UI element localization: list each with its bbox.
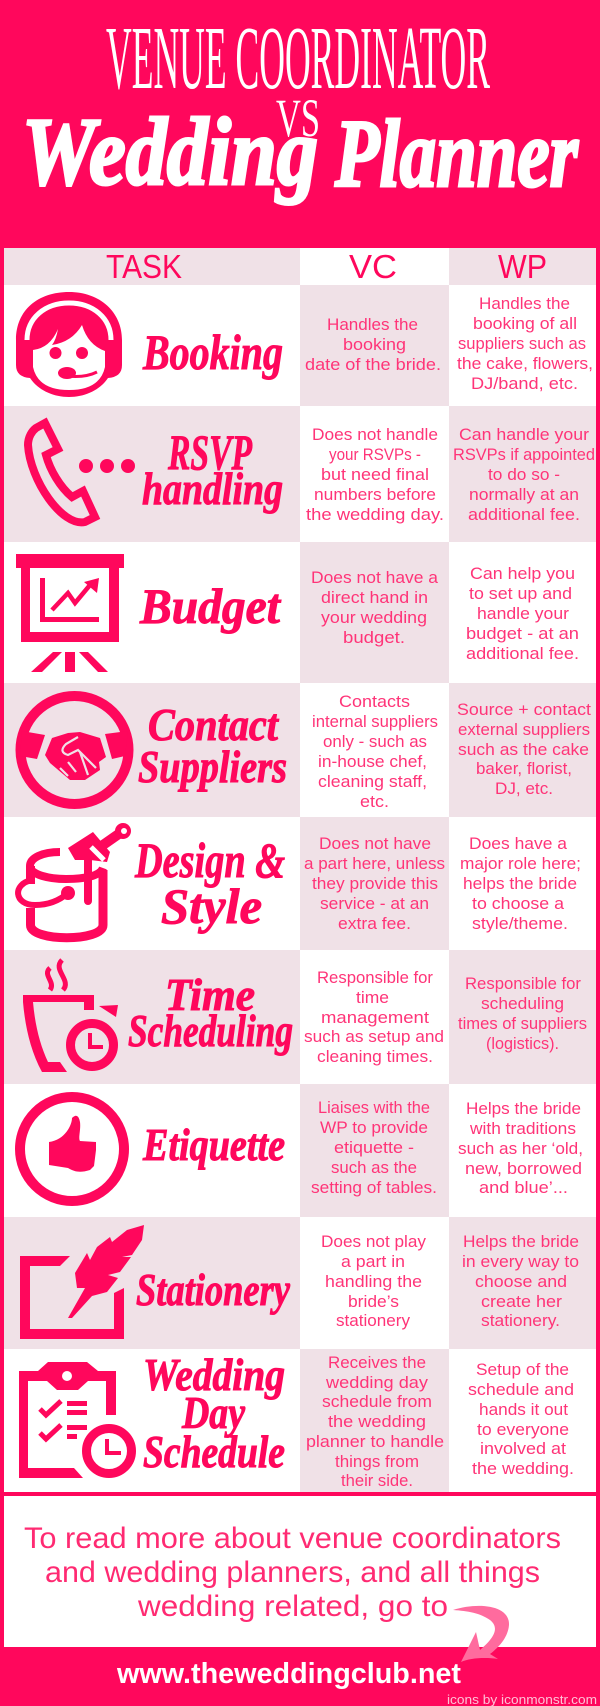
VC text: direct hand in: [321, 588, 428, 607]
WP text: Does have a: [469, 834, 568, 853]
label: Contact Suppliers: Suppliers: [138, 742, 287, 792]
VC text: [304, 968, 444, 1066]
label: Wedding Day Schedule: Schedule: [143, 1427, 285, 1477]
VC text: Does not play: [321, 1232, 427, 1251]
VC text: [311, 1098, 437, 1197]
WP text: [468, 1360, 574, 1478]
VC text: time: [356, 988, 389, 1007]
VC text: wedding day: [325, 1373, 429, 1392]
VC text: the wedding: [328, 1412, 426, 1431]
VC text: [311, 568, 439, 647]
WP text: external suppliers: [458, 720, 590, 739]
WP text: style/theme.: [472, 914, 568, 933]
WP text: suppliers such as: [458, 334, 586, 353]
WP text: involved at: [480, 1439, 566, 1458]
WP text: to set up and: [469, 584, 572, 603]
header row: TASK: [106, 248, 182, 285]
icon: headset operator: [16, 292, 122, 397]
VC text: the wedding day.: [306, 505, 444, 524]
arrow to url: [453, 1606, 509, 1662]
row: Booking: [4, 285, 596, 406]
WP text: create her: [481, 1292, 562, 1311]
footer call to action panel: To read more about venue coordinators: [24, 1522, 561, 1555]
label: Contact Suppliers: Contact: [148, 700, 279, 750]
WP text: with traditions: [469, 1119, 576, 1138]
row: RSVP handling: [4, 406, 596, 542]
WP text: new, borrowed: [465, 1159, 582, 1178]
WP text: the cake, flowers,: [457, 354, 593, 373]
label: Time Scheduling: Scheduling: [128, 1006, 293, 1056]
WP text: to everyone: [477, 1420, 569, 1439]
row: Contact Suppliers: [4, 683, 596, 817]
WP text: and blue’...: [479, 1178, 568, 1197]
label: Design & Style: Design &: [134, 832, 285, 888]
VC text: a part in: [341, 1252, 405, 1271]
WP text: Source + contact: [457, 700, 591, 719]
WP text: choose and: [475, 1272, 567, 1291]
VC text: a part here, unless: [304, 854, 445, 873]
row: Etiquette: [4, 1084, 596, 1217]
title: VS: [276, 88, 320, 148]
WP text: (logistics).: [486, 1034, 559, 1053]
WP text: additional fee.: [468, 505, 580, 524]
WP text: [457, 294, 593, 393]
VC text: schedule from: [322, 1392, 432, 1411]
comparison table: [4, 248, 596, 1492]
WP text: Handles the: [479, 294, 570, 313]
WP text: the wedding.: [472, 1459, 574, 1478]
VC text: Does not handle: [312, 425, 438, 444]
VC text: etiquette -: [334, 1138, 414, 1157]
VC text: management: [321, 1008, 429, 1027]
VC text: but need final: [321, 465, 429, 484]
label: Contact Suppliers: [138, 700, 287, 792]
WP text: times of suppliers: [458, 1014, 587, 1033]
label: Stationery: Stationery: [136, 1265, 291, 1315]
icon: clipboard checklist with clock: [19, 1362, 132, 1478]
icon: paint bucket and brush: [18, 823, 131, 938]
VC text: booking: [343, 335, 406, 354]
VC text: internal suppliers: [312, 712, 438, 731]
label: RSVP handling: RSVP: [167, 424, 252, 480]
VC text: [321, 1232, 427, 1330]
row: Wedding Day Schedule: [4, 1349, 596, 1492]
VC text: [306, 425, 444, 524]
WP text: [457, 700, 591, 798]
WP text: stationery.: [481, 1311, 560, 1330]
WP text: [462, 1232, 579, 1330]
VC text: Does not have a: [311, 568, 439, 587]
WP text: [458, 974, 587, 1053]
VC text: Handles the: [327, 315, 418, 334]
VC text: your RSVPs -: [329, 445, 421, 464]
VC text: [306, 1353, 444, 1490]
WP text: to choose a: [472, 894, 565, 913]
icon: coffee cup with stopwatch: [23, 960, 118, 1072]
VC text: Liaises with the: [318, 1098, 430, 1117]
header row: [4, 248, 596, 285]
label: Budget: Budget: [139, 578, 282, 634]
VC text: [305, 315, 441, 374]
WP text: [460, 834, 581, 933]
label: Design & Style: Style: [161, 878, 262, 934]
VC text: WP to provide: [320, 1118, 428, 1137]
VC text: Contacts: [339, 692, 410, 711]
WP text: Can handle your: [459, 425, 589, 444]
header row: WP: [498, 248, 547, 285]
icon: handshake in ring: [20, 696, 128, 804]
footer call to action panel: wedding related, go to: [137, 1590, 448, 1623]
VC text: such as the: [331, 1158, 417, 1177]
icon: thumbs up in ring: [20, 1097, 124, 1201]
header row: VC: [349, 248, 397, 285]
WP text: normally at an: [469, 485, 579, 504]
WP text: scheduling: [481, 994, 564, 1013]
label: Wedding Day Schedule: Wedding: [143, 1350, 285, 1400]
VC text: stationery: [336, 1311, 411, 1330]
WP text: [453, 425, 595, 524]
label: Time Scheduling: Time: [165, 970, 255, 1020]
icon: frame with feather quill: [20, 1225, 144, 1339]
website url: www.theweddingclub.net: [116, 1658, 461, 1690]
WP text: such as the cake: [458, 740, 589, 759]
WP text: schedule and: [468, 1380, 574, 1399]
VC text: bride’s: [348, 1292, 399, 1311]
VC text: date of the bride.: [305, 355, 441, 374]
VC text: budget.: [343, 628, 405, 647]
VC text: etc.: [360, 792, 389, 811]
row: Design & Style: [4, 817, 596, 950]
WP text: [466, 564, 579, 663]
VC text: your wedding: [321, 608, 427, 627]
label: Booking: Booking: [142, 324, 283, 380]
WP text: [458, 1099, 583, 1197]
WP text: DJ, etc.: [495, 779, 553, 798]
WP text: in every way to: [462, 1252, 579, 1271]
WP text: Can help you: [470, 564, 575, 583]
icon: presentation board with chart: [16, 554, 124, 672]
WP text: Helps the bride: [463, 1232, 579, 1251]
WP text: Setup of the: [476, 1360, 569, 1379]
VC text: setting of tables.: [311, 1178, 437, 1197]
WP text: booking of all: [473, 314, 577, 333]
VC text: things from: [335, 1452, 419, 1471]
VC text: cleaning staff,: [318, 772, 427, 791]
WP text: to do so -: [488, 465, 560, 484]
WP text: such as her ‘old,: [458, 1139, 583, 1158]
label: Etiquette: Etiquette: [142, 1120, 285, 1170]
label: Design & Style: [134, 832, 285, 934]
WP text: handle your: [477, 604, 569, 623]
footer call to action panel: [4, 1496, 596, 1647]
label: Wedding Day Schedule: [143, 1350, 285, 1477]
WP text: additional fee.: [466, 644, 579, 663]
title: [22, 9, 579, 207]
VC text: Responsible for: [317, 968, 433, 987]
WP text: Responsible for: [465, 974, 581, 993]
VC text: they provide this: [312, 874, 438, 893]
WP text: helps the bride: [463, 874, 577, 893]
icon: telephone with dots: [28, 423, 135, 522]
WP text: Helps the bride: [466, 1099, 581, 1118]
label: Wedding Day Schedule: Day: [181, 1388, 246, 1438]
footer call to action panel: and wedding planners, and all things: [45, 1556, 540, 1589]
VC text: extra fee.: [338, 914, 411, 933]
row: Budget: [4, 542, 596, 683]
VC text: planner to handle: [306, 1432, 444, 1451]
WP text: RSVPs if appointed: [453, 445, 595, 464]
label: RSVP handling: [142, 424, 283, 514]
row: Stationery: [4, 1217, 596, 1349]
VC text: [312, 692, 438, 811]
VC text: Does not have: [319, 834, 431, 853]
WP text: hands it out: [479, 1400, 568, 1419]
VC text: in-house chef,: [318, 752, 427, 771]
VC text: their side.: [341, 1471, 413, 1490]
VC text: service - at an: [320, 894, 429, 913]
VC text: only - such as: [323, 732, 427, 751]
label: RSVP handling: handling: [142, 464, 283, 514]
title: Wedding: [22, 98, 318, 205]
WP text: DJ/band, etc.: [471, 374, 578, 393]
WP text: budget - at an: [466, 624, 579, 643]
label: Time Scheduling: [128, 970, 293, 1056]
VC text: handling the: [325, 1272, 422, 1291]
VC text: numbers before: [314, 485, 436, 504]
WP text: baker, florist,: [476, 759, 572, 778]
WP text: major role here;: [460, 854, 581, 873]
row: Time Scheduling: [4, 950, 596, 1084]
VC text: [304, 834, 445, 933]
VC text: such as setup and: [304, 1027, 444, 1046]
VC text: Receives the: [328, 1353, 426, 1372]
VC text: cleaning times.: [317, 1047, 433, 1066]
